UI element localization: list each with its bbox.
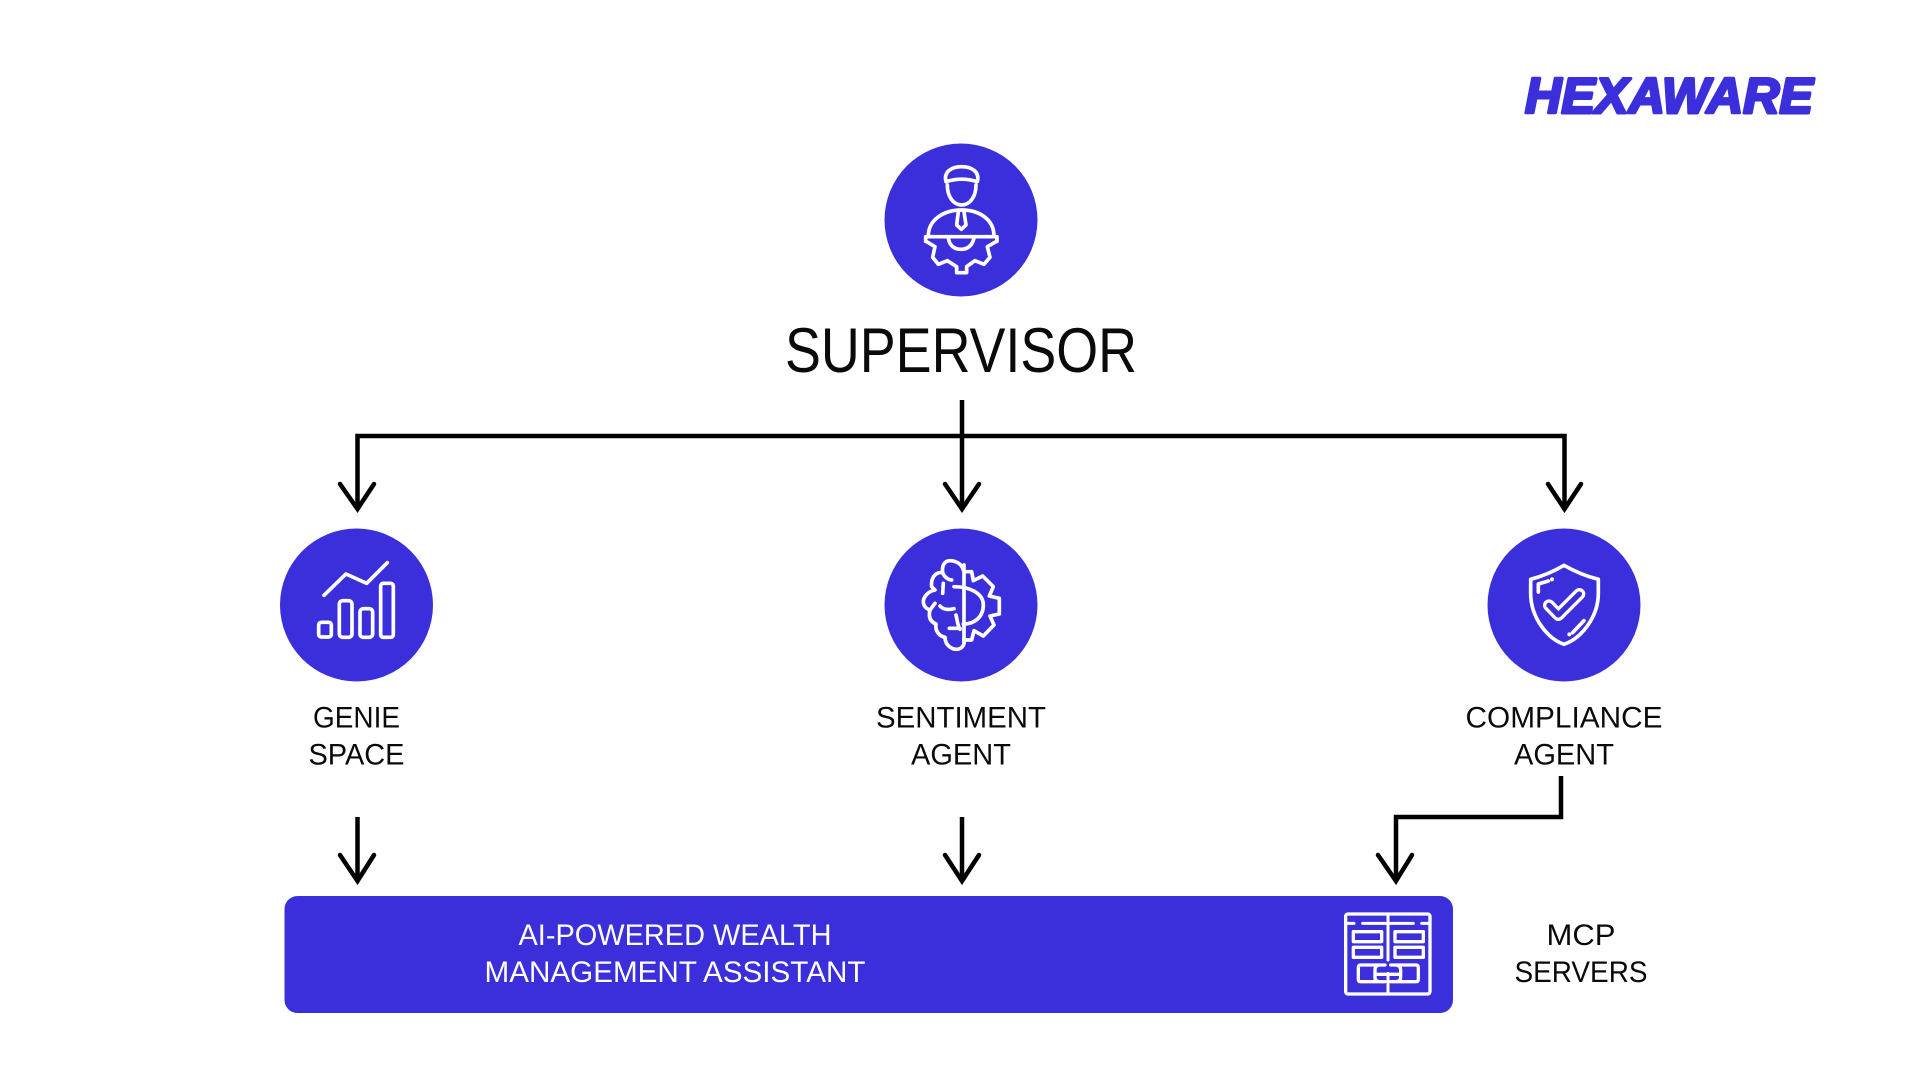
icon: bar chart with trend line xyxy=(319,563,393,637)
arrows: agents to assistant bar xyxy=(340,776,1561,881)
agent: sentiment agent: AGENT xyxy=(911,738,1011,772)
arrows: supervisor to agents xyxy=(340,400,1581,509)
label: MCP servers xyxy=(1514,919,1648,989)
logo: Hexaware: HEXAWARE xyxy=(1525,68,1815,124)
sentiment circle xyxy=(884,528,1038,682)
agent: genie space xyxy=(280,528,433,772)
supervisor node xyxy=(785,144,1137,386)
panel: AI-powered wealth management assistant bar xyxy=(284,896,1453,1013)
agent: genie space: SPACE xyxy=(308,738,404,772)
bar label: AI-POWERED WEALTH xyxy=(518,919,832,952)
genie label: GENIE xyxy=(313,702,400,734)
compliance circle xyxy=(1488,528,1640,682)
icon: linked servers xyxy=(1346,914,1430,994)
supervisor circle xyxy=(884,144,1038,296)
supervisor label: SUPERVISOR xyxy=(785,316,1137,386)
agent: compliance agent xyxy=(1466,528,1662,772)
agent: sentiment agent xyxy=(876,528,1046,772)
sentiment label: SENTIMENT xyxy=(876,702,1046,734)
label: MCP servers: SERVERS xyxy=(1514,956,1648,989)
icon: supervisor with gear xyxy=(926,167,997,273)
panel: AI-powered wealth management assistant bar: MANAGEMENT ASSISTANT xyxy=(484,956,866,989)
genie circle xyxy=(280,528,433,682)
icon: shield with check xyxy=(1531,565,1598,644)
bar background xyxy=(284,896,1453,1013)
icon: brain and gear xyxy=(923,561,999,649)
agent: compliance agent: AGENT xyxy=(1514,738,1614,772)
label: MCP servers: MCP xyxy=(1546,919,1616,952)
compliance label: COMPLIANCE xyxy=(1466,702,1662,734)
